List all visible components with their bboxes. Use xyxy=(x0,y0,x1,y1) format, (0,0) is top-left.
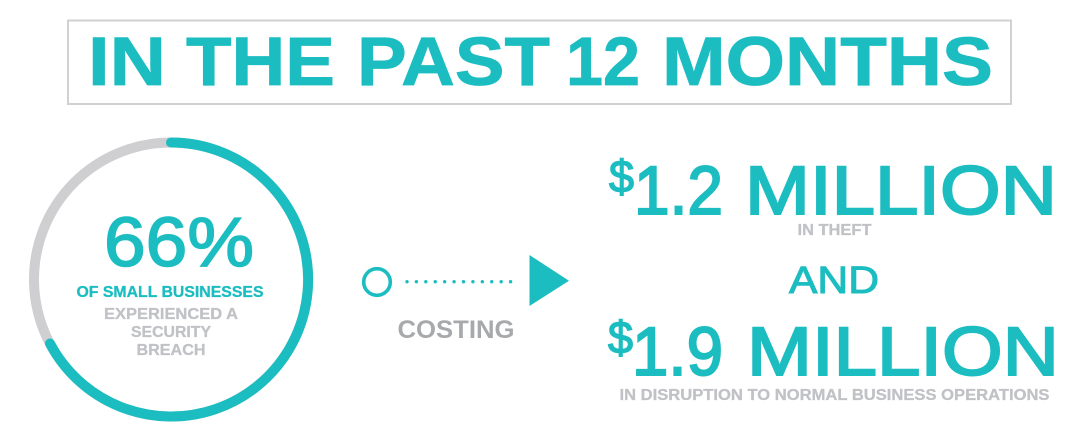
subject label: OF SMALL BUSINESSES xyxy=(76,284,264,301)
description: SECURITY xyxy=(131,324,212,341)
disruption figure xyxy=(608,312,1059,390)
theft figure: $ xyxy=(609,151,634,202)
ring progress arc xyxy=(50,142,308,416)
arrow: costing connector xyxy=(364,255,569,344)
panel: 66% ring stat xyxy=(34,142,308,416)
title text: MONTHS xyxy=(662,23,993,100)
disruption figure: 1.9 xyxy=(632,313,723,390)
arrow start circle xyxy=(364,269,390,295)
percentage: 66% xyxy=(104,203,254,281)
title text xyxy=(88,23,993,100)
title text: IN xyxy=(88,23,166,100)
dotted line xyxy=(407,280,520,283)
description: EXPERIENCED A xyxy=(104,306,238,323)
panel: cost figures xyxy=(608,151,1059,404)
ring track xyxy=(34,142,308,416)
and connector word: AND xyxy=(789,260,879,302)
theft figure xyxy=(609,151,1057,229)
title box xyxy=(68,20,1011,104)
costing label: COSTING xyxy=(398,316,514,344)
description xyxy=(104,306,238,359)
arrow head xyxy=(530,255,569,306)
disruption figure: $ xyxy=(608,312,633,363)
description: BREACH xyxy=(136,342,206,359)
title text: THE xyxy=(186,23,335,100)
theft caption: IN THEFT xyxy=(798,222,872,239)
theft figure: MILLION xyxy=(745,152,1057,229)
disruption caption: IN DISRUPTION TO NORMAL BUSINESS OPERATIONS xyxy=(620,387,1050,404)
title frame xyxy=(68,20,1011,104)
disruption figure: MILLION xyxy=(747,313,1059,390)
title text: 12 xyxy=(566,23,640,100)
theft figure: 1.2 xyxy=(634,152,723,229)
title text: PAST xyxy=(357,23,550,100)
